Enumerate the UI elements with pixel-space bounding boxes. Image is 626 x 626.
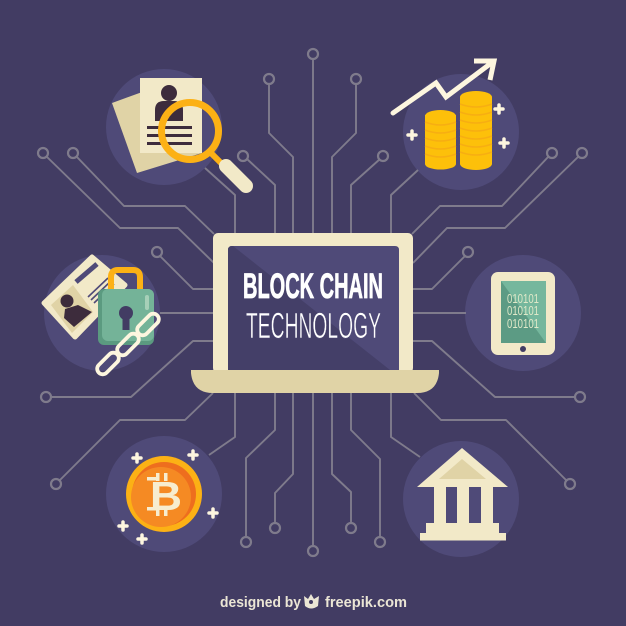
title: technology: TECHNOLOGY — [246, 305, 381, 346]
footer credit: freepik.com — [325, 594, 407, 611]
padlock shackle — [111, 270, 140, 292]
icon: bitcoin coin: B — [150, 473, 182, 519]
icon: identity documents under magnifier — [112, 78, 246, 186]
coin stack: tall — [460, 91, 492, 170]
icon: freepik logo — [304, 594, 319, 608]
icon: tablet with binary — [491, 272, 555, 355]
binary text — [507, 292, 539, 331]
laptop — [191, 233, 439, 393]
padlock body — [98, 289, 154, 345]
binary text: 010101 — [507, 292, 539, 306]
circuit traces — [46, 60, 579, 545]
icon: gold coin stacks with rising arrow — [393, 61, 508, 170]
id card — [44, 257, 125, 337]
footer credit — [220, 594, 407, 611]
icon: bank building — [417, 448, 508, 540]
icon: ID card, padlock and chain — [44, 257, 161, 377]
chain — [95, 311, 161, 377]
laptop bezel — [213, 233, 413, 373]
binary text: 010101 — [507, 317, 539, 331]
icon: bitcoin coin — [119, 451, 217, 543]
coin stack: short — [425, 110, 456, 170]
title: block chain: BLOCK CHAIN — [243, 267, 383, 306]
trace end nodes — [38, 49, 587, 556]
laptop base — [191, 370, 439, 393]
binary text: 010101 — [507, 304, 539, 318]
laptop screen — [228, 246, 399, 370]
arrow: rising trend — [393, 61, 494, 113]
footer credit: designed by — [220, 594, 302, 611]
icon backdrop circles — [44, 69, 581, 557]
